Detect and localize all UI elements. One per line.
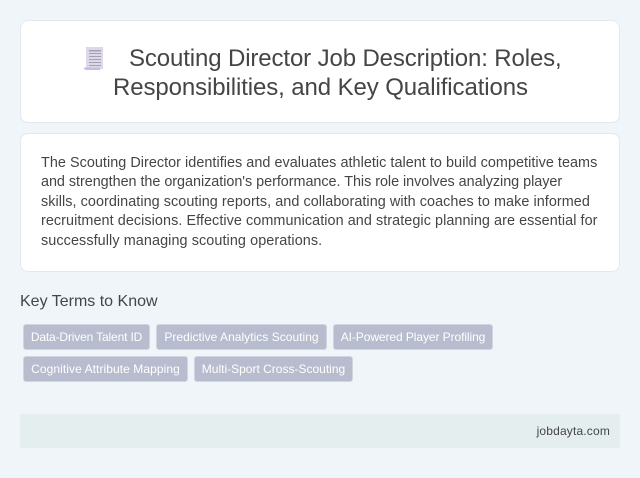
- tag: multi-sport cross-scouting: Multi-Sport Cross-Scouting: [202, 362, 345, 376]
- panel: description: [20, 133, 620, 272]
- description line 2: and strengthen the organization's performance. This role involves analyzing player: [41, 174, 562, 190]
- tag: cognitive attribute mapping: Cognitive Attribute Mapping: [31, 362, 180, 376]
- tag: multi-sport cross-scouting: [194, 356, 353, 382]
- heading: key terms: Key Terms to Know: [20, 293, 158, 310]
- footer bar: [20, 414, 620, 448]
- tag: data-driven talent id: Data-Driven Talent ID: [31, 330, 142, 344]
- title line 2: Responsibilities, and Key Qualifications: [113, 74, 528, 101]
- description line 4: recruitment decisions. Effective communication and strategic planning are essential for: [41, 213, 598, 229]
- icon: document scroll: [84, 47, 103, 70]
- tag: ai-powered player profiling: [333, 324, 493, 350]
- tag: ai-powered player profiling: AI-Powered Player Profiling: [341, 330, 485, 344]
- footer site name: jobdayta.com: [537, 424, 610, 438]
- tag: cognitive attribute mapping: [23, 356, 188, 382]
- description line 1: The Scouting Director identifies and evaluates athletic talent to build competitive teams: [41, 155, 597, 171]
- description line 5: successfully managing scouting operations.: [41, 233, 322, 249]
- description line 3: skills, coordinating scouting reports, and collaborating with coaches to make informed: [41, 194, 590, 210]
- title line 1: Scouting Director Job Description: Roles,: [129, 45, 562, 72]
- panel: title card: [20, 20, 620, 123]
- tag: data-driven talent id: [23, 324, 150, 350]
- tag: predictive analytics scouting: [156, 324, 327, 350]
- tag: predictive analytics scouting: Predictive Analytics Scouting: [164, 330, 319, 344]
